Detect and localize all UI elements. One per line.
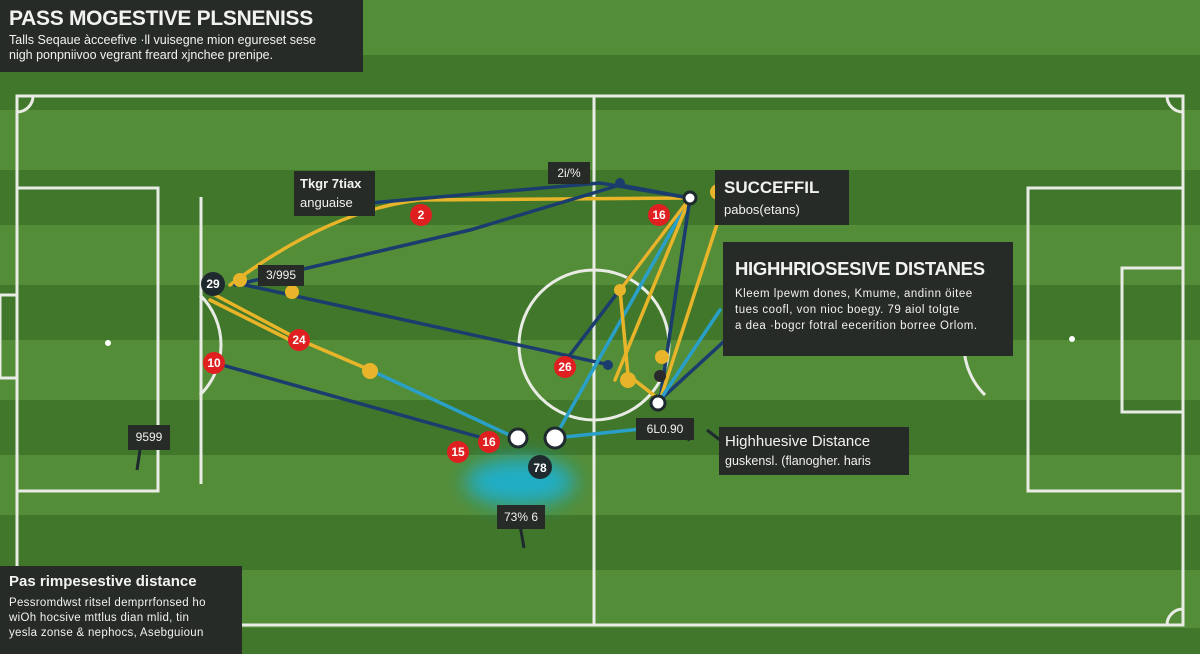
player markers: 78: [533, 461, 547, 475]
panel: high progressive distances: Kleem lpewm dones, Kmume, andinn öitee: [735, 288, 973, 300]
panel: high progressive distances: a dea ·bogcr fotral eecerition borree Orlom.: [735, 320, 978, 332]
label 3/995: 3/995: [266, 268, 296, 282]
heat blob: [465, 458, 575, 506]
panel: successful: pabos(etans): [724, 202, 800, 217]
panel: high distance: Highhuesive Distance: [725, 433, 870, 450]
panel: high distance: [719, 427, 909, 475]
label 6L0.90: [636, 418, 694, 440]
player markers: 10: [207, 356, 221, 370]
panel: high progressive distances: HIGHHRIOSESIVE DISTANES: [735, 258, 985, 279]
label: Tkgr Tiax: anguaise: [300, 195, 353, 210]
pointer tails: [137, 420, 720, 548]
panel: high distance: guskensl. (flanogher. haris: [725, 454, 871, 468]
label 9599: 9599: [136, 430, 162, 444]
player markers: 26: [558, 360, 572, 374]
title panel: [0, 0, 363, 72]
title panel: nigh ponpniivoo vegrant freard xjnchee prenipe.: [9, 48, 273, 62]
label 9599: [128, 425, 170, 450]
player markers: 2: [418, 208, 425, 222]
player markers: 16: [482, 435, 496, 449]
pass lines: [210, 183, 780, 440]
player markers: 29: [206, 277, 220, 291]
label 3/995: [258, 265, 304, 286]
panel: bottom-left: wiOh hocsive mttlus dian mlid, tin: [9, 612, 189, 624]
label 73%6: 73% 6: [504, 510, 538, 524]
player markers: [201, 192, 696, 479]
label 6L0.90: 6L0.90: [647, 422, 683, 436]
panel: bottom-left: [0, 566, 242, 654]
player markers: 24: [292, 333, 306, 347]
player markers: 16: [652, 208, 666, 222]
label: Tkgr Tiax: Tkgr 7tiax: [300, 176, 361, 191]
panel: high progressive distances: [723, 242, 1013, 356]
title panel: Talls Seqaue àcceefive ·ll vuisegne mion egureset sese: [9, 33, 316, 47]
label 2i%: [548, 162, 590, 184]
label 2i%: 2i/%: [557, 166, 581, 180]
panel: bottom-left: Pessromdwst ritsel demprrfonsed ho: [9, 597, 206, 609]
panel: successful: SUCCEFFIL: [724, 178, 819, 197]
player markers: 15: [451, 445, 465, 459]
label 73%6: [497, 505, 545, 529]
panel: bottom-left: Pas rimpesestive distance: [9, 573, 197, 590]
label: Tkgr Tiax: [294, 171, 375, 216]
title panel: PASS MOGESTIVE PLSNENISS: [9, 7, 313, 30]
panel: high progressive distances: tues coofl, von nioc boegy. 79 aiol tolgte: [735, 304, 960, 316]
panel: bottom-left: yesla zonse & nephocs, Asebguioun: [9, 627, 204, 639]
panel: successful: [715, 170, 849, 225]
